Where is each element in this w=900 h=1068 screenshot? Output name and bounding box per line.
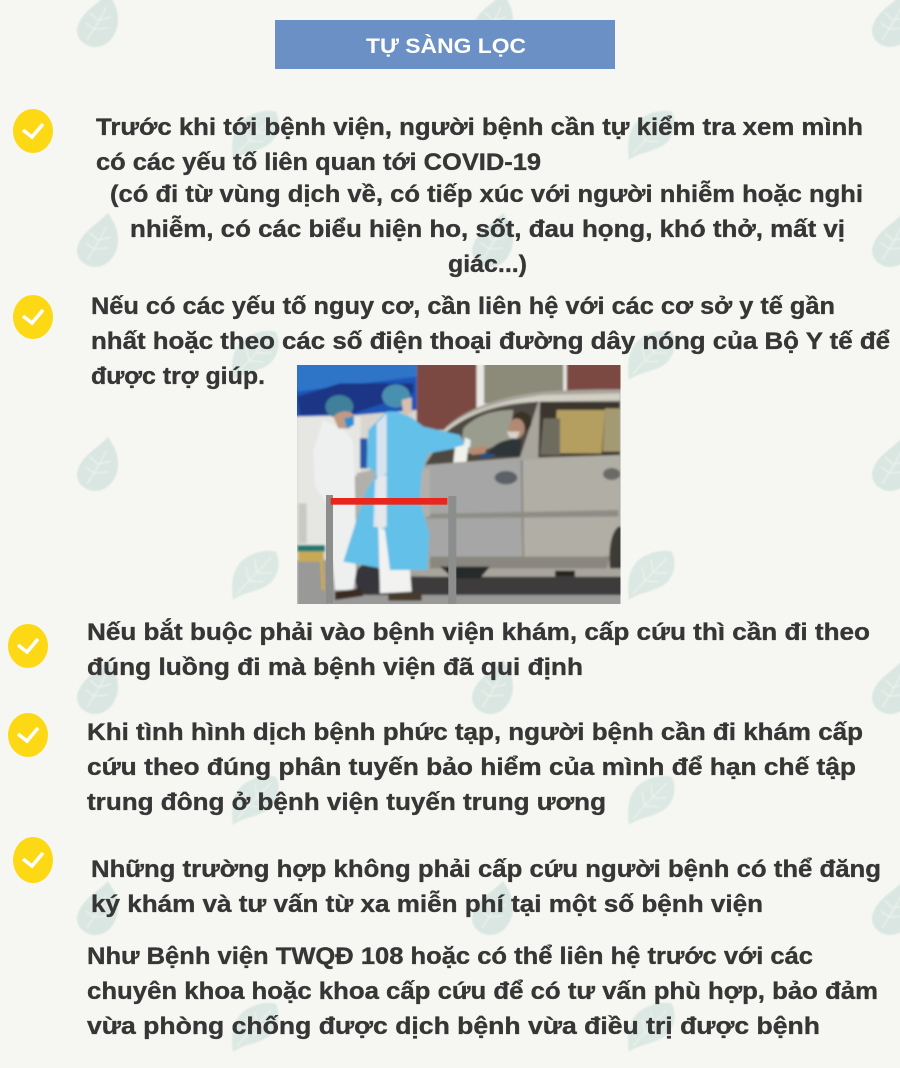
text block: risk factors: nhất hoặc theo các số điện thoại đường dây nóng của Bộ Y tế để — [91, 328, 890, 355]
text block: hospital 108 advice: vừa phòng chống được dịch bệnh vừa điều trị được bệnh — [87, 1013, 820, 1040]
text block: self check: giác...) — [448, 251, 527, 278]
text block: risk factors — [91, 293, 890, 390]
text block: hospital routes — [87, 618, 870, 681]
text block: remote consultation: ký khám và tư vấn từ xa miễn phí tại một số bệnh viện — [91, 890, 763, 918]
title banner: TỰ SÀNG LỌC — [366, 35, 526, 58]
photo: medical staff screening a driver at a car — [290, 360, 631, 610]
title banner — [275, 20, 615, 69]
icon: check 3 — [8, 624, 48, 668]
text block: risk factors: được trợ giúp. — [91, 363, 265, 390]
text block: hospital routes: Nếu bắt buộc phải vào bệnh viện khám, cấp cứu thì cần đi theo — [87, 618, 870, 646]
icon: check 2 — [13, 295, 53, 339]
text block: self check: nhiễm, có các biểu hiện ho, sốt, đau họng, khó thở, mất vị — [130, 215, 845, 243]
text block: insurance tier: trung đông ở bệnh viện tuyến trung ương — [87, 789, 606, 816]
text block: remote consultation: Những trường hợp không phải cấp cứu người bệnh có thể đăng — [91, 856, 881, 883]
icon: check 4 — [8, 713, 48, 757]
text block: self check: có các yếu tố liên quan tới COVID-19 — [96, 149, 541, 176]
text block: self check — [96, 114, 863, 278]
text block: hospital 108 advice: chuyên khoa hoặc khoa cấp cứu để có tư vấn phù hợp, bảo đảm — [87, 978, 878, 1005]
text block: hospital routes: đúng luồng đi mà bệnh viện đã qui định — [87, 654, 583, 681]
text block: insurance tier: Khi tình hình dịch bệnh phức tạp, người bệnh cần đi khám cấp — [87, 719, 863, 746]
text block: remote consultation — [91, 856, 881, 918]
stanchions with red barrier — [326, 495, 456, 604]
text block: risk factors: Nếu có các yếu tố nguy cơ, cần liên hệ với các cơ sở y tế gần — [91, 293, 835, 320]
text block: insurance tier — [87, 719, 863, 816]
text block: self check: (có đi từ vùng dịch về, có tiếp xúc với người nhiễm hoặc nghi — [110, 180, 863, 208]
text block: hospital 108 advice: Như Bệnh viện TWQĐ 108 hoặc có thể liên hệ trước với các — [87, 943, 813, 970]
text block: self check: Trước khi tới bệnh viện, người bệnh cần tự kiểm tra xem mình — [96, 114, 863, 141]
icon: check 5 — [13, 837, 53, 883]
text block: insurance tier: cứu theo đúng phân tuyến bảo hiểm của mình để hạn chế tập — [87, 754, 856, 781]
text block: hospital 108 advice — [87, 943, 878, 1040]
icon: check 1 — [13, 109, 53, 153]
